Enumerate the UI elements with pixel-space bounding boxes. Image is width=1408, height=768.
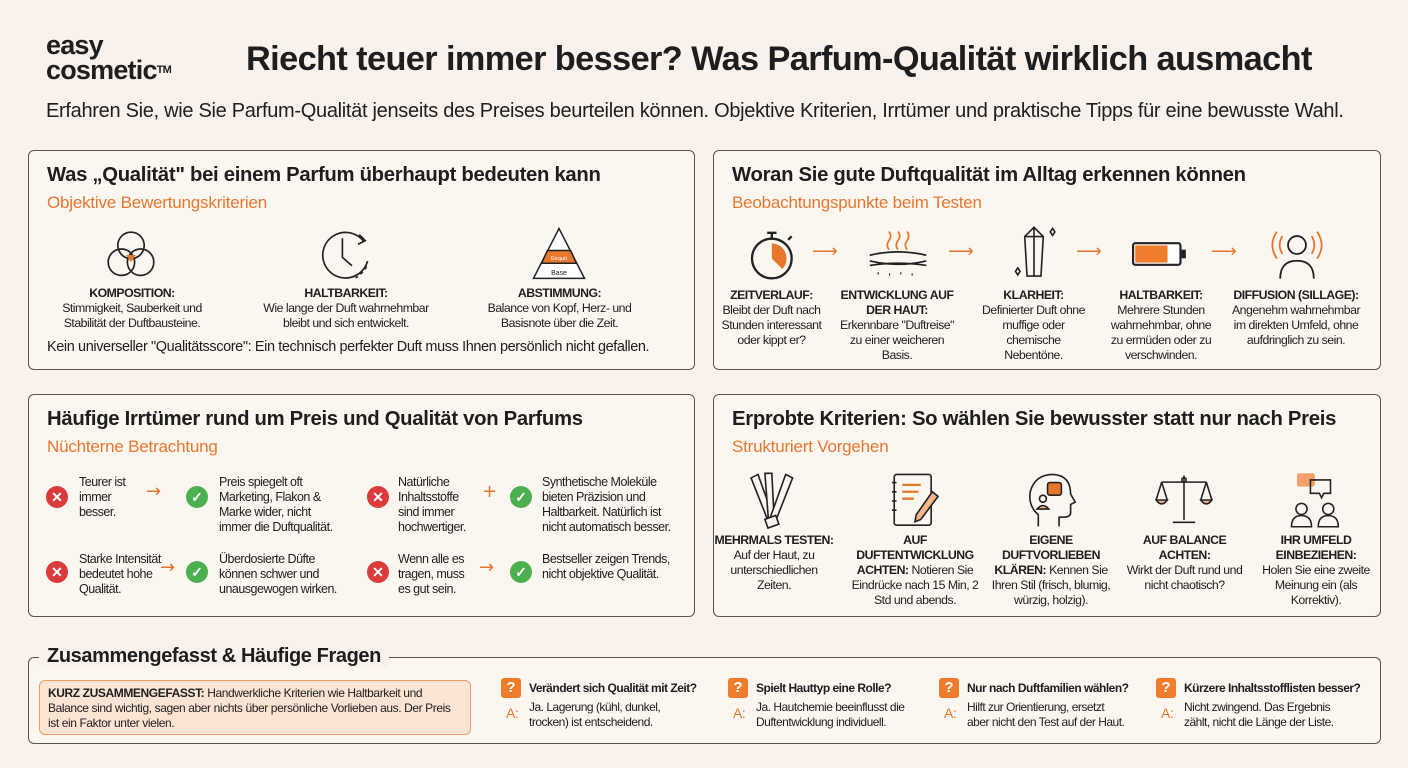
panel: misconceptions: Häufige Irrtümer rund um Preis und Qualität von Parfums — [47, 408, 583, 430]
row 2: tragen, muss — [398, 567, 464, 581]
row 2: Qualität. — [79, 582, 121, 596]
row 2: nicht objektive Qualität. — [542, 567, 659, 581]
row 2: Überdosierte Düfte — [219, 552, 315, 566]
faq 2: Duftentwicklung individuell. — [756, 715, 886, 729]
row 1: → — [146, 481, 161, 502]
row 2: ✕ — [51, 564, 63, 580]
faq 4: Nicht zwingend. Das Ergebnis — [1184, 700, 1330, 714]
icon: head — [1029, 474, 1076, 526]
row 1: ✓ — [191, 489, 203, 505]
arrow: ⟶ — [948, 241, 974, 262]
item: umfeld: IHR UMFELD EINBEZIEHEN: — [1276, 533, 1356, 562]
item: klarheit: Definierter Duft ohne muffige oder chemische Nebentöne. — [982, 303, 1085, 362]
item: umfeld: Holen Sie eine zweite Meinung ein (als Korrektiv). — [1262, 563, 1370, 607]
faq 1: Ja. Lagerung (kühl, dunkel, — [529, 700, 660, 714]
row 1: sind immer — [398, 505, 454, 519]
faq 4: A: — [1161, 705, 1173, 721]
faq 2 — [728, 678, 904, 729]
row 1: hochwertiger. — [398, 520, 466, 534]
panel: quality criteria — [28, 150, 695, 370]
row 2: bedeutet hohe — [79, 567, 152, 581]
row 1: besser. — [79, 505, 116, 519]
faq 4 — [1156, 678, 1360, 729]
icon: stopwatch — [750, 232, 793, 280]
panel: criteria — [713, 394, 1381, 617]
row 1: bieten Präzision und — [542, 490, 645, 504]
row 1: Synthetische Moleküle — [542, 475, 657, 489]
item: komposition — [62, 286, 202, 330]
icon: crystal — [1014, 226, 1056, 277]
panel: quality criteria: Was „Qualität" bei einem Parfum überhaupt bedeuten kann — [47, 164, 601, 186]
row 2: ✓ — [191, 564, 203, 580]
logo — [46, 30, 172, 85]
panel: observation: Woran Sie gute Duftqualität im Alltag erkennen können — [732, 164, 1246, 186]
item: haltbarkeit: HALTBARKEIT: — [304, 286, 388, 300]
panel: summary & faq — [28, 657, 1381, 744]
item: diffusion: DIFFUSION (SILLAGE): — [1233, 288, 1359, 302]
panel: misconceptions: Nüchterne Betrachtung — [47, 437, 218, 456]
arrow: ⟶ — [1076, 241, 1102, 262]
faq 3: A: — [944, 705, 956, 721]
faq 2: ? — [733, 679, 743, 696]
item: balance — [1126, 533, 1242, 592]
row 2 — [46, 552, 670, 596]
row 2: ✕ — [372, 564, 384, 580]
row 1: Marketing, Flakon & — [219, 490, 321, 504]
item: abstimmung: ABSTIMMUNG: — [518, 286, 601, 300]
row 1: ✕ — [51, 489, 63, 505]
faq 2: Spielt Hauttyp eine Rolle? — [756, 681, 891, 695]
item: balance: AUF BALANCE ACHTEN: — [1143, 533, 1226, 562]
row 2: unausgewogen wirken. — [219, 582, 337, 596]
panel: criteria: Strukturiert Vorgehen — [732, 437, 888, 456]
item: haltbarkeit: Mehrere Stunden wahrnehmbar, ohne zu ermüden oder zu verschwinden. — [1111, 303, 1211, 362]
faq 4: ? — [1161, 679, 1171, 696]
row 1: Preis spiegelt oft — [219, 475, 302, 489]
panel: misconceptions — [28, 394, 695, 617]
row 2: Bestseller zeigen Trends, — [542, 552, 670, 566]
faq 4: zählt, nicht die Länge der Liste. — [1184, 715, 1334, 729]
item: duftentwicklung: AUF DUFTENTWICKLUNG ACHTEN: Notieren Sie Eindrücke nach 15 Min, 2 Std und abends. — [852, 533, 978, 607]
icon: person sillage — [1271, 231, 1323, 279]
row 2: Starke Intensität — [79, 552, 161, 566]
row 2: ✓ — [515, 564, 527, 580]
item: abstimmung: Balance von Kopf, Herz- und Basisnote über die Zeit. — [488, 301, 631, 330]
row 1: ✕ — [372, 489, 384, 505]
row 2: → — [160, 557, 175, 578]
item: umfeld — [1262, 533, 1370, 607]
icon: battery — [1132, 242, 1186, 266]
item: zeitverlauf: Bleibt der Duft nach Stunden interessant oder kippt er? — [722, 303, 821, 347]
faq 1 — [501, 678, 697, 729]
row 1: Inhaltsstoffe — [398, 490, 459, 504]
row 1: + — [482, 481, 497, 502]
panel: quality criteria: Objektive Bewertungskriterien — [47, 193, 267, 212]
item: duftvorlieben: EIGENE DUFTVORLIEBEN KLÄREN: Kennen Sie Ihren Stil (frisch, blumig, würzig, holzig). — [992, 533, 1110, 607]
icon: clock — [322, 232, 368, 279]
row 1: Teurer ist — [79, 475, 125, 489]
row 2: es gut sein. — [398, 582, 456, 596]
faq 1: Verändert sich Qualität mit Zeit? — [529, 681, 697, 695]
row 1: ✓ — [515, 489, 527, 505]
row 1: nicht automatisch besser. — [542, 520, 671, 534]
faq 3: Nur nach Duftfamilien wählen? — [967, 681, 1129, 695]
item: balance: Wirkt der Duft rund und nicht chaotisch? — [1127, 563, 1242, 592]
row 1: Haltbarkeit. Natürlich ist — [542, 505, 661, 519]
row 1 — [46, 475, 671, 534]
panel: observation — [713, 150, 1381, 370]
item: mehrmals testen: MEHRMALS TESTEN: — [714, 533, 834, 547]
item: haltbarkeit — [263, 286, 429, 330]
panel: observation: Beobachtungspunkte beim Testen — [732, 193, 982, 212]
faq 1: trocken) ist entscheidend. — [529, 715, 653, 729]
row 1: immer — [79, 490, 111, 504]
icon: notepad — [892, 474, 940, 526]
item: diffusion: Angenehm wahrnehmbar im direkten Umfeld, ohne aufdringlich zu sein. — [1232, 303, 1360, 347]
row 1: immer die Duftqualität. — [219, 520, 333, 534]
item: haltbarkeit: HALTBARKEIT: — [1119, 288, 1203, 302]
faq 2: Ja. Hautchemie beeinflusst die — [756, 700, 904, 714]
icon: pyramid: Base — [551, 270, 567, 277]
row 2: Wenn alle es — [398, 552, 464, 566]
arrow: ⟶ — [812, 241, 838, 262]
heading: Zusammengefasst & Häufige Fragen — [47, 645, 381, 667]
icon: scale — [1155, 476, 1213, 524]
subtitle: Erfahren Sie, wie Sie Parfum-Qualität jenseits des Preises beurteilen können. Objektive Kriterien, Irrtümer und praktische Tipps für eine bewusste Wahl. — [46, 100, 1344, 122]
item: abstimmung — [488, 286, 632, 330]
panel: criteria: Erprobte Kriterien: So wählen Sie bewusster statt nur nach Preis — [732, 408, 1336, 430]
item: haltbarkeit: Wie lange der Duft wahrnehmbar bleibt und sich entwickelt. — [263, 301, 429, 330]
faq 1: A: — [506, 705, 518, 721]
row 1: Natürliche — [398, 475, 449, 489]
item: mehrmals testen — [714, 533, 834, 592]
faq 3: Hilft zur Orientierung, ersetzt — [967, 700, 1104, 714]
item: entwicklung: ENTWICKLUNG AUF DER HAUT: — [841, 288, 953, 317]
icon: pyramid — [532, 227, 586, 280]
item: mehrmals testen: Auf der Haut, zu unterschiedlichen Zeiten. — [730, 548, 818, 592]
item: komposition: KOMPOSITION: — [89, 286, 175, 300]
row 2: können schwer und — [219, 567, 319, 581]
icon: test strips — [750, 472, 794, 530]
item: entwicklung: Erkennbare "Duftreise" zu einer weicheren Basis. — [840, 318, 954, 362]
title: Riecht teuer immer besser? Was Parfum-Qualität wirklich ausmacht — [246, 40, 1312, 78]
faq 2: A: — [733, 705, 745, 721]
faq 4: Kürzere Inhaltsstofflisten besser? — [1184, 681, 1360, 695]
logo: easy — [46, 30, 103, 60]
item: entwicklung — [840, 288, 954, 362]
icon: skin — [870, 231, 926, 276]
row 1: Marke wider, nicht — [219, 505, 311, 519]
faq 3: ? — [944, 679, 954, 696]
item: klarheit: KLARHEIT: — [1003, 288, 1064, 302]
icon: pyramid: Exquit — [551, 256, 567, 262]
arrow: ⟶ — [1211, 241, 1237, 262]
item: zeitverlauf: ZEITVERLAUF: — [730, 288, 813, 302]
note: Kein universeller "Qualitätsscore": Ein technisch perfekter Duft muss Ihnen persönlich nicht gefallen. — [47, 339, 649, 355]
item: komposition: Stimmigkeit, Sauberkeit und Stabilität der Duftbausteine. — [62, 301, 202, 330]
faq 1: ? — [506, 679, 516, 696]
faq 3: aber nicht den Test auf der Haut. — [967, 715, 1124, 729]
faq 3 — [939, 678, 1129, 729]
row 2: → — [479, 557, 494, 578]
logo: cosmeticTM — [46, 55, 171, 85]
icon: circles — [107, 231, 155, 276]
summary box: KURZ ZUSAMMENGEFASST: Handwerkliche Kriterien wie Haltbarkeit und Balance sind wichtig, sagen aber nichts über persönliche Vorlieben aus. Der Preis ist ein Faktor unter vielen. — [48, 686, 451, 730]
icon: people — [1290, 473, 1340, 528]
